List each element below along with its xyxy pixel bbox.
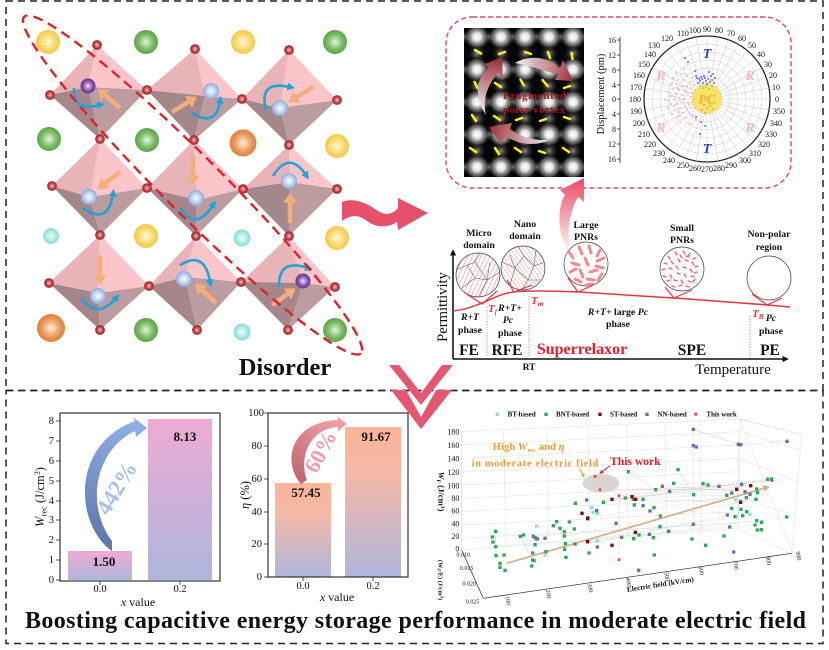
annotation: high Wrec and eta bbox=[472, 442, 599, 470]
phase region labels bbox=[459, 341, 780, 359]
pink R points bbox=[665, 68, 696, 124]
bottom dashed frame bbox=[6, 390, 823, 644]
heading: Disorder: Disorder bbox=[239, 354, 331, 381]
phase composition labels: phase bbox=[498, 328, 523, 339]
arrow: wavy arrow to right panel bbox=[342, 198, 428, 230]
phase region labels: PE bbox=[760, 342, 780, 359]
domain labels: Small bbox=[670, 223, 694, 234]
increase arrow bbox=[291, 416, 347, 484]
B-site spheres bbox=[80, 78, 310, 304]
trend arrow bbox=[507, 488, 765, 563]
y tick labels: 60 bbox=[252, 474, 262, 485]
polarization arrows bbox=[100, 87, 313, 305]
displacement axis: 8 bbox=[612, 125, 616, 134]
green center points bbox=[700, 86, 713, 113]
phase labels bbox=[655, 47, 755, 157]
BNT-based points bbox=[492, 470, 787, 570]
rotation arrows bbox=[74, 86, 308, 309]
legend: BT-based bbox=[508, 410, 536, 418]
domain circle: large PNRs bbox=[564, 242, 608, 286]
domain labels: domain bbox=[509, 231, 541, 242]
characteristic temperatures: B bbox=[758, 313, 764, 321]
A-site spheres bbox=[36, 30, 349, 342]
polar grid bbox=[644, 36, 770, 162]
depth axis and ticks: 0.020 bbox=[463, 581, 476, 587]
plot box grid bbox=[462, 419, 802, 598]
x labels: x value bbox=[120, 595, 155, 609]
x labels: 0.2 bbox=[366, 581, 380, 592]
vortex curved arrows bbox=[478, 57, 503, 115]
dashed ellipse highlighting disorder bbox=[4, 0, 381, 374]
bar chart: efficiency bbox=[238, 408, 408, 604]
y tick labels: 3 bbox=[49, 515, 54, 526]
arrow: curved arrow from large PNRs up to vortex panel bbox=[559, 178, 584, 256]
y axis title: ) bbox=[436, 509, 446, 512]
ST-based points bbox=[582, 486, 751, 545]
BT-based points bbox=[537, 500, 750, 555]
angle labels: 180 bbox=[629, 95, 641, 104]
angle labels: 230 bbox=[653, 149, 665, 158]
displacement axis: 4 bbox=[612, 81, 616, 90]
angle labels: 160 bbox=[633, 71, 645, 80]
increase label: 442% bbox=[91, 457, 142, 519]
annotation: high Wrec and eta: in moderate electric field bbox=[472, 459, 599, 470]
y axis tick labels: 100 bbox=[447, 481, 459, 490]
x labels: x value bbox=[319, 590, 354, 604]
characteristic temperatures: m bbox=[538, 300, 544, 308]
electric field tick labels: 300 bbox=[586, 583, 593, 593]
depth axis title: F bbox=[437, 568, 442, 571]
angle labels: 250 bbox=[677, 161, 689, 170]
panel: polar vortex and displacement bbox=[446, 17, 791, 188]
phase composition labels: Pc bbox=[766, 313, 777, 324]
frame and ticks bbox=[264, 413, 408, 581]
legend: NN-based bbox=[657, 410, 687, 418]
angle labels: 260 bbox=[689, 164, 701, 173]
angle labels: 220 bbox=[644, 140, 656, 149]
annotation: high Wrec and eta: η bbox=[559, 442, 565, 453]
y tick labels: 20 bbox=[252, 539, 262, 550]
angle labels: 310 bbox=[749, 149, 761, 158]
angle labels: 350 bbox=[773, 107, 785, 116]
phase composition labels: R+T+ large Pc bbox=[587, 307, 649, 318]
depth axis title: (W bbox=[437, 560, 444, 568]
legend: This work bbox=[706, 410, 737, 418]
domain labels: Nano bbox=[514, 219, 536, 230]
angle labels: 90 bbox=[703, 25, 711, 34]
y axis title: (J/cm bbox=[436, 483, 446, 507]
phase region labels: FE bbox=[459, 342, 479, 359]
phase composition labels: phase bbox=[458, 325, 483, 336]
y tick labels bbox=[248, 408, 264, 583]
title: Boosting capacitive energy storage performance in moderate electric field bbox=[25, 608, 807, 634]
depth axis title: 3 bbox=[440, 596, 445, 599]
displacement axis: 8 bbox=[612, 66, 616, 75]
angle labels: 330 bbox=[765, 130, 777, 139]
electric field tick labels: 600 bbox=[697, 566, 704, 576]
3D scatter chart bbox=[435, 410, 802, 606]
legend: ST-based bbox=[610, 410, 637, 418]
angle labels: 110 bbox=[677, 29, 689, 38]
polar displacement chart bbox=[596, 25, 785, 174]
y tick labels: 0 bbox=[257, 572, 262, 583]
permittivity curve bbox=[453, 291, 790, 311]
yellow polarization arrows bbox=[470, 50, 572, 154]
displacement axis: 16 bbox=[608, 155, 616, 164]
y axis tick labels: 140 bbox=[447, 455, 459, 464]
y axis tick labels bbox=[447, 427, 459, 554]
x labels: 0.0 bbox=[296, 581, 310, 592]
axis labels: RT bbox=[523, 363, 536, 373]
legend: BNT-based bbox=[556, 410, 589, 418]
depth axis and ticks bbox=[457, 550, 792, 605]
oxygen nodes bbox=[45, 41, 341, 334]
angle labels: 170 bbox=[630, 83, 642, 92]
phase composition labels: R+T+ bbox=[497, 303, 522, 314]
domain labels: Micro bbox=[466, 228, 492, 239]
electric field tick labels: 900 bbox=[794, 551, 801, 561]
blue T points bbox=[685, 58, 715, 134]
phase labels: T bbox=[703, 142, 713, 157]
value labels bbox=[291, 429, 391, 500]
phase labels: R bbox=[655, 121, 666, 136]
axis labels: Permittivity bbox=[435, 271, 451, 342]
pale series lines bbox=[496, 429, 738, 560]
depth axis and ticks: 0.010 bbox=[457, 553, 470, 559]
Pc center disc bbox=[692, 84, 722, 114]
angle labels: 270 bbox=[701, 165, 713, 174]
angle labels: 240 bbox=[663, 156, 675, 165]
angle labels: 40 bbox=[757, 50, 765, 59]
y tick labels: 5 bbox=[49, 476, 54, 487]
domain labels: Non-polar bbox=[747, 229, 791, 240]
displacement axis: Displacement (pm) bbox=[596, 53, 607, 134]
angle labels: 340 bbox=[770, 119, 782, 128]
depth axis and ticks: 0.015 bbox=[460, 566, 473, 572]
characteristic temperatures: T bbox=[488, 303, 495, 315]
angle labels: 10 bbox=[772, 83, 780, 92]
y tick labels bbox=[49, 416, 55, 586]
domain labels: Large bbox=[573, 220, 599, 231]
phase composition labels: phase bbox=[759, 326, 784, 337]
phase region labels: Superrelaxor bbox=[537, 341, 627, 358]
domain circle: micro domain bbox=[456, 253, 500, 298]
y tick labels: 6 bbox=[49, 456, 54, 467]
y axis tick labels: 40 bbox=[451, 519, 459, 528]
characteristic temperatures: T bbox=[531, 295, 538, 307]
y axis tick labels: 0 bbox=[455, 545, 459, 554]
y axis tick labels: 180 bbox=[447, 427, 459, 436]
electric field tick labels: 200 bbox=[544, 589, 551, 599]
angle labels: 0 bbox=[775, 95, 779, 104]
angle labels: 300 bbox=[739, 156, 751, 165]
y axis title: η (%) bbox=[238, 481, 252, 509]
phase labels: R bbox=[744, 69, 755, 84]
depth axis title: ) bbox=[437, 598, 444, 600]
angle labels: 60 bbox=[738, 34, 746, 43]
domain labels: domain bbox=[463, 240, 495, 251]
y axis title: ) bbox=[33, 467, 47, 471]
electric field axis title: Electric field (kV/cm) bbox=[626, 574, 695, 594]
angle labels bbox=[629, 25, 785, 174]
frame and ticks bbox=[56, 413, 220, 585]
displacement axis: 16 bbox=[608, 36, 616, 45]
phase labels: R bbox=[744, 121, 755, 136]
axis labels bbox=[435, 271, 771, 378]
phase composition labels: Pc bbox=[503, 315, 514, 326]
depth axis title: /E) (J/cm bbox=[437, 570, 444, 597]
top dashed frame bbox=[6, 1, 823, 390]
x labels bbox=[296, 581, 380, 604]
y axis title: W bbox=[436, 472, 446, 481]
x labels bbox=[93, 584, 187, 609]
y tick labels: 80 bbox=[252, 441, 262, 452]
electric field tick labels: 800 bbox=[764, 556, 771, 566]
highlight ellipse bbox=[583, 474, 619, 493]
y tick labels: 40 bbox=[252, 507, 262, 518]
y tick labels: 8 bbox=[49, 416, 54, 427]
displacement axis: 0 bbox=[612, 95, 616, 104]
displacement axis: 4 bbox=[612, 110, 616, 119]
annotation: this work: This work bbox=[610, 455, 661, 468]
vortex label bbox=[503, 90, 566, 116]
y tick labels: 1 bbox=[49, 555, 54, 566]
angle labels: 290 bbox=[725, 161, 737, 170]
annotation arrows bbox=[579, 466, 610, 475]
phase composition labels: phase bbox=[606, 319, 631, 330]
depth axis and ticks: 0.025 bbox=[466, 599, 479, 605]
phase composition labels: R+T bbox=[460, 312, 480, 323]
y tick labels: 4 bbox=[49, 496, 55, 507]
y axis title: (J/cm bbox=[33, 475, 47, 506]
y axis tick labels: 80 bbox=[451, 494, 459, 503]
y axis title: F bbox=[435, 480, 441, 484]
y axis title: rec bbox=[38, 506, 48, 517]
rounded dashed frame bbox=[446, 17, 791, 188]
bars bbox=[68, 419, 212, 580]
angle labels: 80 bbox=[715, 26, 723, 35]
displacement axis bbox=[596, 36, 620, 164]
angle labels: 150 bbox=[638, 60, 650, 69]
characteristic temperatures bbox=[488, 295, 764, 321]
panel: perovskite crystal structure bbox=[4, 0, 381, 374]
dotted phase boundaries bbox=[487, 296, 750, 357]
increase label: 60% bbox=[299, 426, 342, 477]
characteristic temperatures: T bbox=[752, 308, 759, 320]
annotation: high Wrec and eta: rec bbox=[527, 447, 536, 454]
phase composition labels bbox=[458, 303, 784, 339]
This work points bbox=[595, 476, 772, 560]
y axis title: W bbox=[33, 515, 47, 527]
electric field tick labels bbox=[503, 551, 801, 606]
y tick labels: 2 bbox=[49, 535, 54, 546]
electric field tick labels: 400 bbox=[624, 577, 631, 587]
angle labels: 320 bbox=[758, 140, 770, 149]
domain labels: PNRs bbox=[574, 232, 598, 243]
NN-based points bbox=[535, 429, 787, 552]
displacement axis: 12 bbox=[608, 140, 616, 149]
domain circle: non-polar region bbox=[747, 256, 791, 300]
arrow: double chevron bbox=[389, 365, 453, 429]
angle labels: 210 bbox=[638, 130, 650, 139]
vortex label: polar vortex bbox=[503, 104, 566, 116]
angle labels: 50 bbox=[748, 41, 756, 50]
dotted connection lines bbox=[496, 429, 787, 560]
y axis title: 3 bbox=[439, 506, 445, 509]
electric field tick labels: 500 bbox=[662, 572, 670, 582]
domain labels: PNRs bbox=[670, 235, 694, 246]
angle labels: 130 bbox=[648, 41, 660, 50]
y axis title: 3 bbox=[33, 471, 42, 475]
axes bbox=[453, 254, 784, 359]
bar chart: Wrec bbox=[33, 413, 220, 609]
angle labels: 200 bbox=[633, 119, 645, 128]
y tick labels: 7 bbox=[49, 436, 54, 447]
y tick labels: 0 bbox=[49, 575, 54, 586]
value labels: 57.45 bbox=[291, 485, 321, 500]
phase labels: T bbox=[703, 47, 713, 62]
y axis tick labels: 60 bbox=[451, 507, 459, 516]
domain circle: small PNRs bbox=[660, 247, 704, 291]
angle labels: 100 bbox=[689, 26, 701, 35]
legend bbox=[496, 410, 737, 418]
callout tails bbox=[465, 278, 782, 305]
phase labels: R bbox=[655, 69, 666, 84]
x labels: 0.0 bbox=[93, 584, 107, 595]
value labels: 8.13 bbox=[174, 429, 197, 444]
angle labels: 140 bbox=[644, 50, 656, 59]
phase region labels: SPE bbox=[678, 342, 706, 359]
x labels: 0.2 bbox=[173, 584, 187, 595]
value labels bbox=[93, 429, 197, 569]
displacement axis: 12 bbox=[608, 51, 616, 60]
y axis tick labels: 20 bbox=[451, 532, 459, 541]
axis labels: Temperature bbox=[695, 362, 771, 378]
electric field tick labels: 700 bbox=[731, 561, 739, 570]
annotation: high Wrec and eta: and bbox=[536, 442, 559, 453]
domain labels bbox=[463, 219, 791, 253]
y axis tick labels: 160 bbox=[447, 441, 459, 450]
bars bbox=[275, 427, 401, 577]
angle labels: 70 bbox=[727, 29, 735, 38]
angle labels: 120 bbox=[661, 34, 673, 43]
STEM image bbox=[464, 28, 584, 177]
angle labels: 280 bbox=[713, 164, 725, 173]
characteristic temperatures: f bbox=[495, 308, 498, 316]
panel: permittivity vs temperature bbox=[435, 219, 791, 378]
angle labels: 30 bbox=[764, 60, 772, 69]
octahedra bbox=[49, 45, 337, 330]
phase labels: PC bbox=[698, 93, 717, 108]
increase arrow bbox=[85, 417, 147, 551]
angle labels: 190 bbox=[630, 107, 642, 116]
value labels: 91.67 bbox=[361, 429, 391, 444]
vortex label: Fragmented bbox=[503, 90, 566, 102]
value labels: 1.50 bbox=[93, 554, 115, 569]
angle labels: 20 bbox=[769, 71, 777, 80]
electric field tick labels: 100 bbox=[503, 596, 511, 606]
y tick labels: 100 bbox=[248, 408, 264, 419]
phase region labels: RFE bbox=[492, 342, 522, 359]
domain circle: nano domain bbox=[501, 246, 545, 290]
y axis tick labels: 120 bbox=[447, 468, 459, 477]
domain labels: region bbox=[756, 242, 783, 253]
annotation: high Wrec and eta: High W bbox=[493, 442, 527, 453]
